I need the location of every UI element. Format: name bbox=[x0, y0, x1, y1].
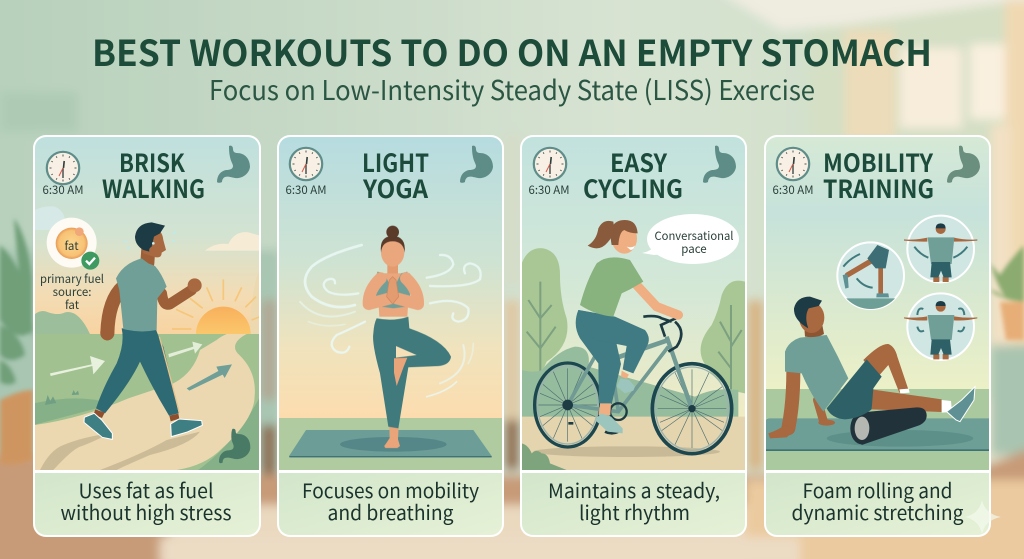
speech bubble: pace bbox=[681, 241, 707, 257]
clock bbox=[286, 148, 326, 198]
caption: Uses fat as fuel bbox=[78, 475, 214, 504]
speech bubble: Conversational bbox=[654, 228, 734, 244]
panel: brisk walking: fat bbox=[64, 238, 79, 254]
heading bbox=[102, 144, 205, 206]
caption: Foam rolling and bbox=[802, 475, 952, 504]
icon: stomach bbox=[703, 146, 736, 183]
clock bbox=[42, 152, 84, 198]
fuel source label: primary fuel bbox=[40, 271, 104, 287]
mobility scene bbox=[765, 216, 990, 451]
clock bbox=[772, 148, 814, 198]
check badge bbox=[81, 252, 99, 270]
yoga scene bbox=[289, 226, 492, 457]
background plants bbox=[0, 218, 1024, 464]
mat bbox=[289, 430, 492, 457]
speech bubble bbox=[642, 214, 739, 264]
heading bbox=[583, 144, 683, 206]
clock: 6:30 AM bbox=[42, 182, 84, 198]
caption bbox=[302, 475, 480, 526]
mat bbox=[765, 418, 990, 451]
panel: easy cycling bbox=[520, 135, 747, 537]
caption bbox=[60, 475, 232, 526]
stomach lower bbox=[219, 429, 250, 463]
caption: Maintains a steady, bbox=[548, 475, 720, 504]
panel: brisk walking bbox=[33, 135, 261, 537]
icon: stomach bbox=[947, 146, 980, 183]
panel: light yoga bbox=[277, 135, 504, 537]
inset: leg swing bbox=[837, 242, 904, 312]
seated man upper leg and arm behind bbox=[768, 372, 942, 438]
clock: 6:30 AM bbox=[286, 182, 326, 198]
walking scene bbox=[33, 206, 260, 474]
arrows bbox=[50, 342, 232, 391]
yoga figure bbox=[369, 226, 451, 448]
walker bbox=[96, 328, 179, 416]
title: BEST WORKOUTS TO DO ON AN EMPTY STOMACH bbox=[92, 25, 932, 77]
fuel source label: source: bbox=[53, 284, 91, 300]
subtitle: Focus on Low-Intensity Steady State (LISS) Exercise bbox=[209, 69, 815, 108]
fuel source label bbox=[41, 274, 104, 309]
heading bbox=[362, 144, 429, 206]
sparkle bbox=[965, 500, 1001, 534]
heading bbox=[823, 144, 934, 206]
fuel source label: fat bbox=[65, 297, 80, 313]
caption: dynamic stretching bbox=[792, 497, 964, 526]
breath swirls bbox=[300, 245, 481, 397]
icon: stomach bbox=[217, 146, 250, 183]
caption bbox=[792, 475, 964, 526]
heading: WALKING bbox=[102, 170, 205, 206]
heading: BRISK bbox=[119, 144, 186, 180]
cyclist bbox=[576, 220, 678, 433]
caption bbox=[548, 475, 720, 526]
caption: and breathing bbox=[328, 497, 454, 526]
heading: EASY bbox=[610, 144, 667, 180]
caption: without high stress bbox=[60, 497, 232, 526]
seated man bbox=[785, 297, 975, 422]
heading: CYCLING bbox=[583, 170, 683, 206]
foam roller bbox=[850, 407, 927, 445]
clock bbox=[528, 148, 570, 198]
bicycle bbox=[535, 316, 732, 454]
heading: LIGHT bbox=[362, 144, 429, 180]
caption: Focuses on mobility bbox=[302, 475, 480, 504]
clock: 6:30 AM bbox=[528, 182, 570, 198]
heading: MOBILITY bbox=[823, 144, 933, 180]
inset: arm raise bbox=[904, 216, 977, 282]
clock: 6:30 AM bbox=[772, 182, 814, 198]
cycling scene bbox=[522, 220, 745, 470]
caption: light rhythm bbox=[579, 497, 690, 526]
panel: mobility training bbox=[764, 135, 991, 537]
heading: YOGA bbox=[362, 170, 429, 206]
inset: arm circles bbox=[904, 293, 977, 360]
icon: stomach bbox=[460, 146, 493, 183]
heading: TRAINING bbox=[823, 170, 934, 206]
fat icon bbox=[47, 218, 99, 270]
